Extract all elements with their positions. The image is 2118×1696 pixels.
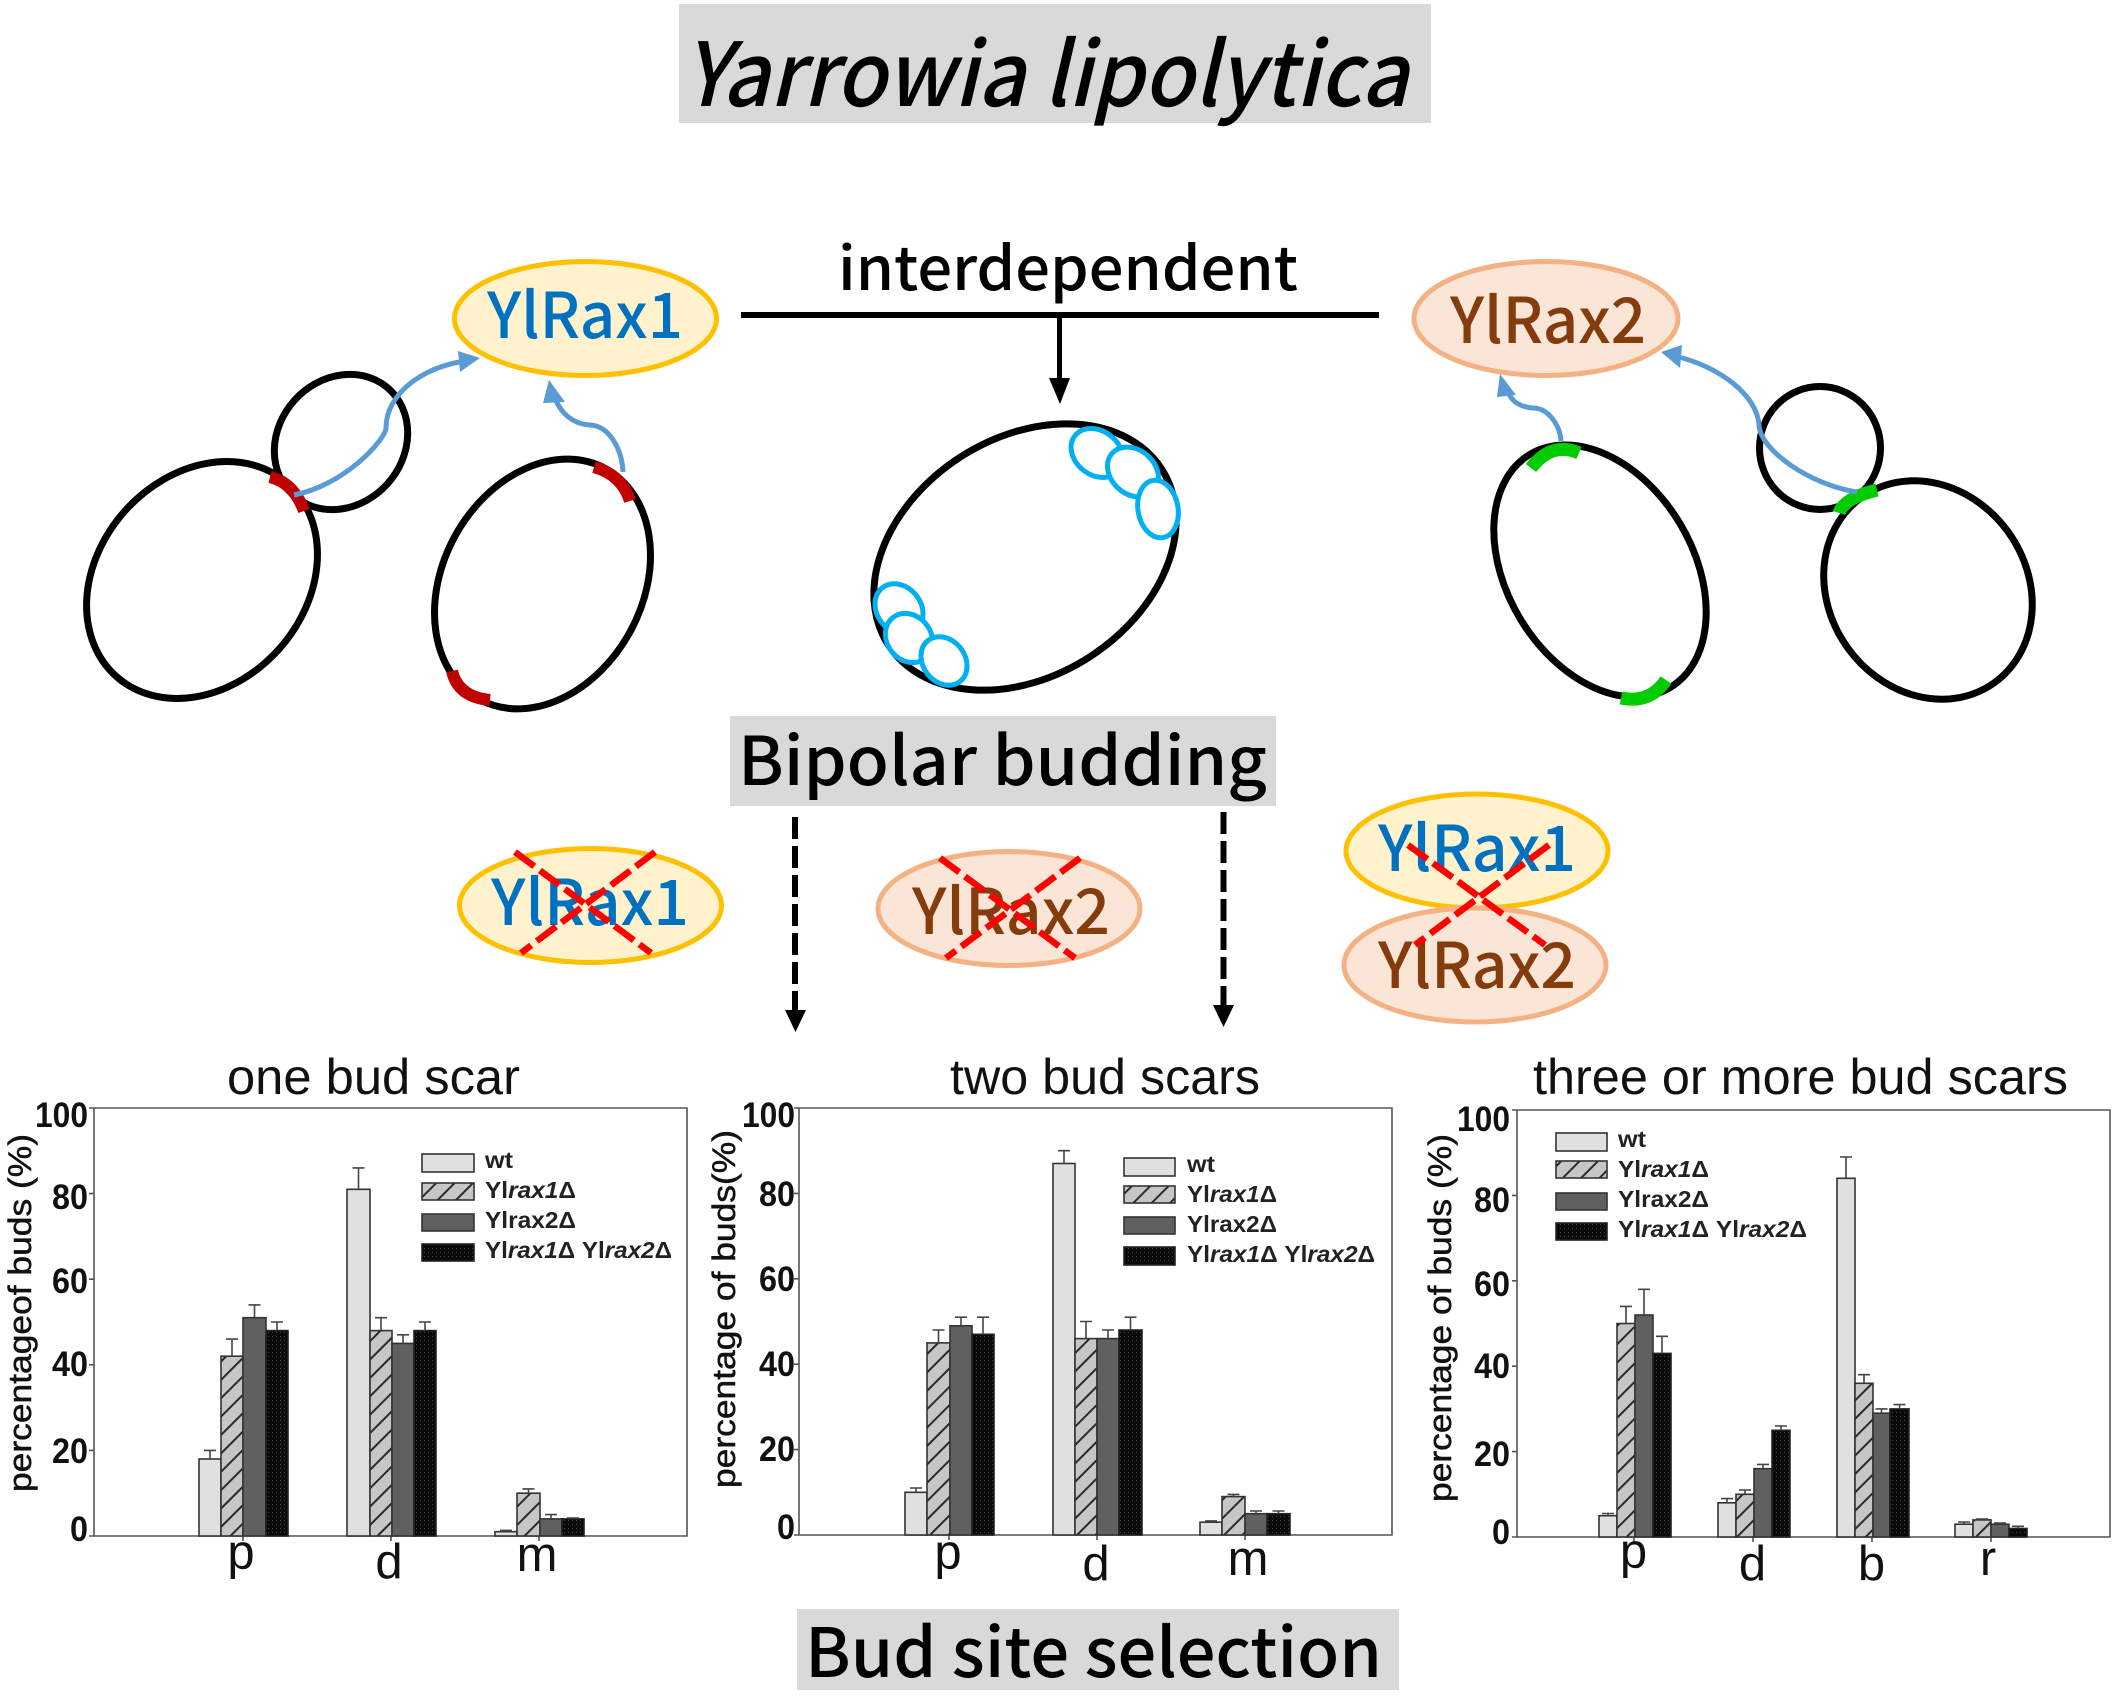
y axis numbers <box>35 1096 88 1549</box>
axes and ticks <box>1512 1110 2110 1542</box>
chart: one bud scar <box>2 1049 687 1589</box>
x axis labels: r <box>1980 1532 1996 1586</box>
x axis labels: p <box>1620 1525 1647 1579</box>
y axis numbers: 80 <box>52 1178 88 1217</box>
legend <box>422 1147 672 1263</box>
legend: Ylrax1Δ <box>485 1177 576 1203</box>
y axis numbers: 20 <box>52 1432 88 1471</box>
deleted protein: YlRax1 <box>460 848 722 962</box>
budding cell with YlRax2 at neck <box>1661 345 2075 740</box>
y axis numbers: 100 <box>742 1096 795 1135</box>
y axis numbers: 60 <box>759 1260 795 1299</box>
cell with two YlRax2 poles <box>1450 374 1750 735</box>
cell with two YlRax1 poles <box>392 380 693 747</box>
heading: Bud site selection: Bud site selection <box>805 1598 1382 1696</box>
y axis numbers: 80 <box>759 1175 795 1214</box>
y axis title: percentage of buds(%) <box>706 1130 742 1488</box>
legend: wt <box>1617 1126 1646 1152</box>
y axis numbers <box>1457 1100 1510 1552</box>
deleted protein: YlRax2: YlRax2 <box>911 862 1110 953</box>
central cell with bipolar bud scars <box>824 369 1226 745</box>
chart: three or more bud scars <box>1422 1049 2110 1591</box>
legend: Ylrax1Δ Ylrax2Δ <box>1187 1241 1375 1267</box>
y axis numbers: 40 <box>759 1345 795 1384</box>
x axis labels: d <box>1739 1537 1766 1591</box>
bars: b <box>1837 1157 1909 1537</box>
bars: p <box>1599 1289 1671 1537</box>
deleted proteins: YlRax1 and YlRax2: YlRax2 <box>1377 916 1576 1007</box>
budding cell with YlRax1 at neck <box>39 347 480 745</box>
y axis numbers: 0 <box>1492 1513 1510 1552</box>
deleted proteins: YlRax1 and YlRax2 <box>1344 794 1608 1022</box>
x axis labels <box>1620 1525 1996 1591</box>
legend <box>1556 1126 1807 1242</box>
legend: Ylrax2Δ <box>1187 1211 1277 1237</box>
axes and ticks <box>89 1108 687 1541</box>
bars: d <box>1053 1151 1142 1535</box>
bars: d <box>1718 1426 1790 1537</box>
y axis title: percentage of buds (%) <box>1422 1134 1458 1502</box>
bars: r <box>1955 1519 2027 1537</box>
connector line between proteins <box>741 312 1379 318</box>
title: Yarrowia lipolytica <box>683 5 1412 132</box>
legend <box>1124 1151 1375 1267</box>
y axis numbers: 0 <box>70 1510 88 1549</box>
legend: Ylrax1Δ <box>1618 1156 1709 1182</box>
x axis labels: p <box>227 1526 255 1580</box>
protein: YlRax1: YlRax1 <box>486 266 683 357</box>
legend: wt <box>484 1147 513 1173</box>
x axis labels: b <box>1858 1537 1885 1591</box>
legend: wt <box>1186 1151 1215 1177</box>
dashed arrow: left <box>785 817 806 1032</box>
interdependent label: interdependent <box>838 221 1298 308</box>
x axis labels <box>227 1526 557 1589</box>
protein: YlRax1 <box>454 262 716 376</box>
deleted protein: YlRax2 <box>878 852 1140 966</box>
deleted protein: YlRax1: YlRax1 <box>490 853 689 944</box>
y axis numbers: 20 <box>759 1430 795 1469</box>
y axis title: percentageof buds (%) <box>2 1134 38 1492</box>
x axis labels: m <box>1228 1532 1268 1586</box>
y axis numbers: 100 <box>1457 1100 1510 1139</box>
y axis numbers: 60 <box>52 1262 88 1301</box>
y axis numbers <box>742 1096 795 1547</box>
y axis numbers: 100 <box>35 1096 88 1135</box>
legend: Ylrax2Δ <box>1618 1186 1709 1212</box>
chart title: two bud scars: two bud scars <box>950 1049 1260 1105</box>
legend: Ylrax1Δ Ylrax2Δ <box>1618 1216 1807 1242</box>
y axis numbers: 80 <box>1474 1181 1510 1220</box>
x axis labels: m <box>517 1528 557 1582</box>
x axis labels: d <box>375 1535 403 1589</box>
bars: p <box>199 1305 288 1536</box>
x axis labels: d <box>1082 1537 1110 1591</box>
heading: Bipolar budding: Bipolar budding <box>738 708 1267 805</box>
bars: m <box>495 1489 584 1536</box>
y axis numbers: 0 <box>777 1508 795 1547</box>
protein: YlRax2 <box>1414 262 1678 376</box>
y axis numbers: 60 <box>1474 1265 1510 1304</box>
bars: m <box>1200 1494 1290 1535</box>
y axis numbers: 40 <box>1474 1347 1510 1386</box>
protein: YlRax2: YlRax2 <box>1449 271 1646 362</box>
bars: p <box>905 1317 994 1535</box>
axes and ticks <box>794 1108 1392 1540</box>
legend: Ylrax2Δ <box>485 1207 576 1233</box>
bars: d <box>347 1168 436 1536</box>
y axis numbers: 20 <box>1474 1435 1510 1474</box>
chart title: three or more bud scars: three or more bud scars <box>1533 1049 2068 1105</box>
arrow: interdependent to bipolar cell <box>1049 315 1070 404</box>
x axis labels <box>934 1526 1268 1591</box>
chart title: one bud scar: one bud scar <box>227 1049 520 1105</box>
legend: Ylrax1Δ <box>1187 1181 1277 1207</box>
y axis numbers: 40 <box>52 1345 88 1384</box>
dashed arrow: right <box>1213 812 1234 1027</box>
legend: Ylrax1Δ Ylrax2Δ <box>485 1237 672 1263</box>
x axis labels: p <box>934 1526 962 1580</box>
chart: two bud scars <box>706 1049 1392 1591</box>
deleted proteins: YlRax1 and YlRax2: YlRax1 <box>1377 799 1576 890</box>
